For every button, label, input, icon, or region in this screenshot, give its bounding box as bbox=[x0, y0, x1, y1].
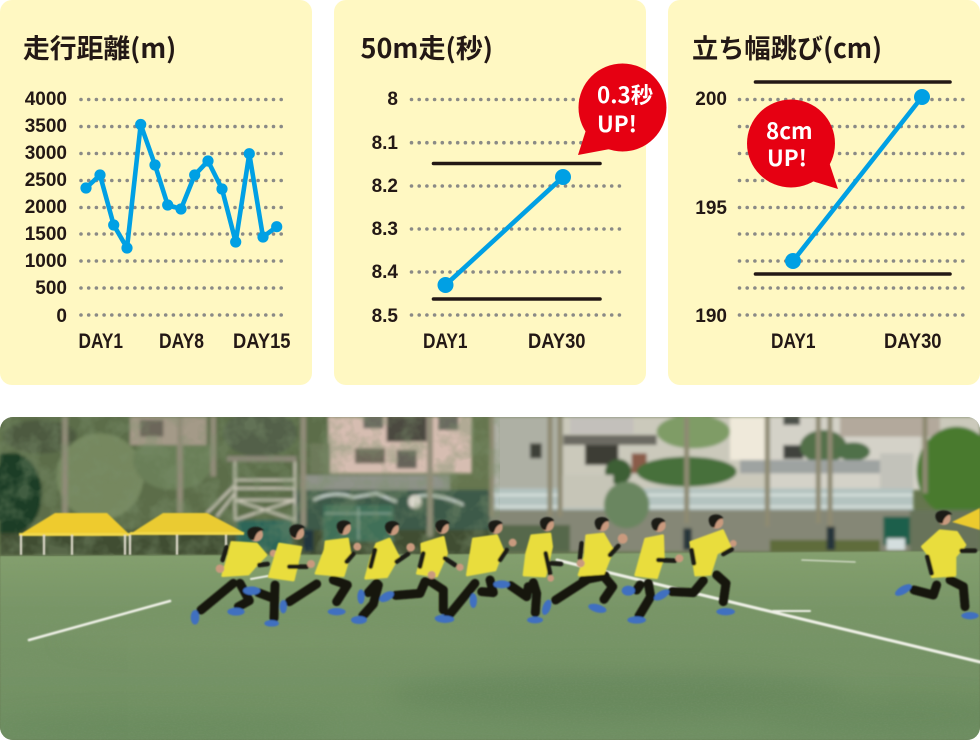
x axis labels: DAY1 bbox=[771, 330, 816, 353]
reference bars bbox=[756, 82, 950, 274]
line chart: sprint time bbox=[438, 169, 571, 293]
y axis labels: 1000 bbox=[25, 251, 67, 272]
x axis labels: DAY30 bbox=[528, 330, 586, 353]
y axis labels: 190 bbox=[695, 306, 727, 327]
y axis labels: 8 bbox=[387, 89, 398, 110]
y axis labels: 8.4 bbox=[372, 262, 398, 283]
grass field bbox=[0, 551, 980, 740]
panel: standing long jump bbox=[668, 0, 980, 385]
x axis labels bbox=[423, 330, 586, 353]
x axis labels: DAY1 bbox=[78, 330, 123, 353]
white field lines bbox=[29, 560, 980, 662]
y axis labels: 3500 bbox=[25, 116, 67, 137]
callout: 0.3 seconds up: UP! bbox=[597, 107, 637, 139]
tent corner beside last runner bbox=[952, 508, 980, 530]
runner 10 bbox=[652, 514, 737, 615]
callout: 8cm up: UP! bbox=[767, 141, 807, 173]
y axis labels: 8.1 bbox=[372, 133, 398, 154]
runner 3 bbox=[280, 520, 361, 615]
runner 5 bbox=[378, 520, 464, 622]
y axis labels: 0 bbox=[56, 306, 67, 327]
runner 7 bbox=[493, 517, 561, 623]
callout: 0.3 seconds up: 0.3秒 bbox=[597, 78, 653, 110]
line chart: distance per day bbox=[80, 119, 282, 254]
runner 2 bbox=[243, 524, 315, 627]
photo: team sprinting on a grass field bbox=[0, 410, 980, 740]
y axis labels bbox=[695, 89, 727, 327]
dotted grid bbox=[740, 100, 966, 315]
runner 6 bbox=[436, 520, 517, 623]
y axis labels: 1500 bbox=[25, 224, 67, 245]
x axis labels bbox=[78, 330, 291, 353]
foliage mottling bbox=[0, 417, 500, 555]
x axis labels: DAY15 bbox=[233, 330, 291, 353]
y axis labels: 200 bbox=[695, 89, 727, 110]
background: right buildings and trees bbox=[490, 415, 980, 552]
x axis labels: DAY30 bbox=[884, 330, 942, 353]
dotted grid bbox=[81, 100, 285, 315]
runner 9 bbox=[622, 518, 683, 624]
runner 11 bbox=[893, 510, 979, 619]
heading: running distance: 走行距離(m) bbox=[23, 27, 176, 66]
callout: 0.3 seconds up bbox=[578, 64, 666, 155]
callout: 8cm up bbox=[747, 100, 838, 189]
heading: standing long jump: 立ち幅跳び(cm) bbox=[692, 27, 882, 66]
y axis labels: 4000 bbox=[25, 89, 67, 110]
heading: 50m sprint: 50m走(秒) bbox=[360, 27, 493, 66]
dotted grid bbox=[412, 100, 622, 315]
grass texture bbox=[0, 556, 980, 740]
runner 1 bbox=[191, 527, 277, 625]
y axis labels bbox=[372, 89, 398, 327]
x axis labels bbox=[771, 330, 942, 353]
y axis labels bbox=[25, 89, 67, 327]
y axis labels: 2500 bbox=[25, 170, 67, 191]
runner 4 bbox=[351, 521, 415, 624]
y axis labels: 2000 bbox=[25, 197, 67, 218]
background: left trees and buildings bbox=[0, 410, 980, 557]
reference bars bbox=[434, 164, 600, 299]
runners bbox=[191, 510, 979, 627]
grass shading bbox=[438, 681, 808, 708]
callout: 8cm up: 8cm bbox=[766, 114, 813, 146]
y axis labels: 195 bbox=[695, 198, 727, 219]
panel: 50m sprint bbox=[334, 0, 666, 385]
y axis labels: 3000 bbox=[25, 143, 67, 164]
y axis labels: 8.3 bbox=[372, 219, 398, 240]
panel: running distance bbox=[0, 0, 312, 385]
runner 8 bbox=[540, 517, 628, 616]
line chart: jump distance bbox=[785, 89, 930, 269]
y axis labels: 500 bbox=[35, 278, 67, 299]
x axis labels: DAY8 bbox=[159, 330, 204, 353]
y axis labels: 8.2 bbox=[372, 176, 398, 197]
x axis labels: DAY1 bbox=[423, 330, 468, 353]
y axis labels: 8.5 bbox=[372, 306, 398, 327]
yellow tents bbox=[19, 513, 245, 555]
